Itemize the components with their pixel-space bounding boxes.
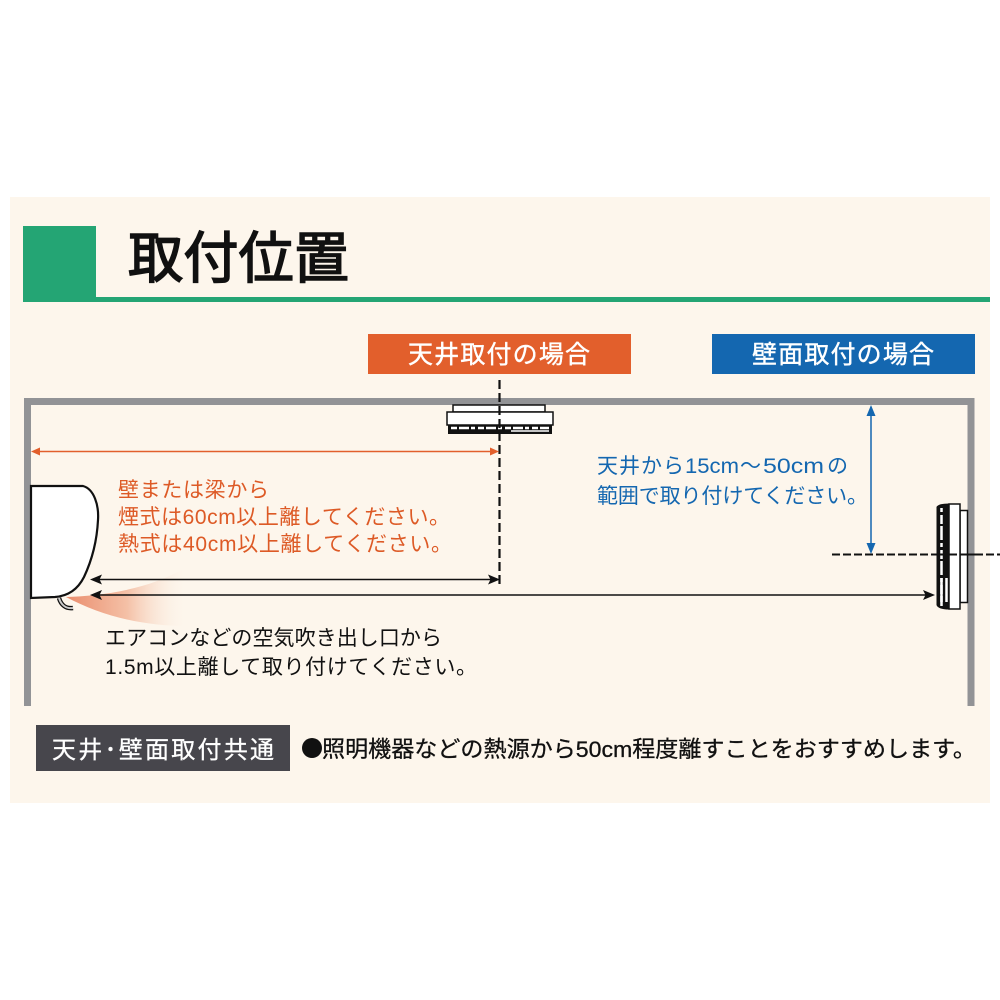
icon: bullet: [302, 738, 322, 758]
label: common to ceiling and wall: [36, 725, 290, 771]
heading: mounting position: [23, 226, 990, 302]
text: height from ceiling: 50cm: [763, 455, 824, 478]
arrow: height from ceiling, blue: [866, 405, 876, 554]
text: air conditioner distance: エアコンなどの空気吹き出し口から: [105, 627, 442, 650]
airflow from air conditioner: [66, 566, 188, 626]
text: height from ceiling: ～: [740, 455, 761, 478]
text: wall or beam distance: 熱式は40cm以上離してください。: [118, 533, 452, 556]
text: height from ceiling: 範囲で取り付けてください。: [597, 485, 868, 508]
label: wall mounting: 壁面取付の場合: [752, 341, 934, 369]
arrow: distance from wall, orange: [31, 448, 499, 456]
wall device centre line: [832, 554, 1000, 556]
text: height from ceiling: の: [827, 455, 848, 478]
text: air conditioner distance: [105, 627, 477, 679]
panel: background: [10, 197, 990, 803]
arrow: to ceiling line, black: [90, 574, 500, 584]
text: air conditioner distance: 1.5m以上離して取り付けてください。: [105, 656, 477, 679]
icon: wall mounted device: [937, 504, 968, 609]
label: ceiling mounting: 天井取付の場合: [408, 341, 590, 369]
text: heat source note: 照明機器などの熱源から50cm程度離すことをおすすめします。: [322, 737, 976, 762]
text: height from ceiling: 天井から: [597, 455, 684, 478]
icon: air conditioner: [31, 486, 98, 608]
text: wall or beam distance: [118, 479, 452, 556]
text: height from ceiling: [597, 455, 868, 508]
re-drawn centre line over wall device: [938, 554, 975, 556]
label: common to ceiling and wall: 天井･壁面取付共通: [52, 737, 274, 764]
text: height from ceiling: 15cm: [685, 455, 739, 478]
room walls: [28, 402, 971, 706]
arrow: to wall device, black: [90, 590, 935, 600]
text: wall or beam distance: 壁または梁から: [118, 479, 269, 502]
label: wall mounting: [712, 334, 975, 374]
icon: ceiling mounted device: [447, 405, 553, 431]
heading: mounting position: 取付位置: [128, 227, 349, 290]
text: wall or beam distance: 煙式は60cm以上離してください。: [118, 506, 450, 529]
label: ceiling mounting: [368, 334, 631, 374]
ceiling device centre line: [498, 380, 501, 584]
